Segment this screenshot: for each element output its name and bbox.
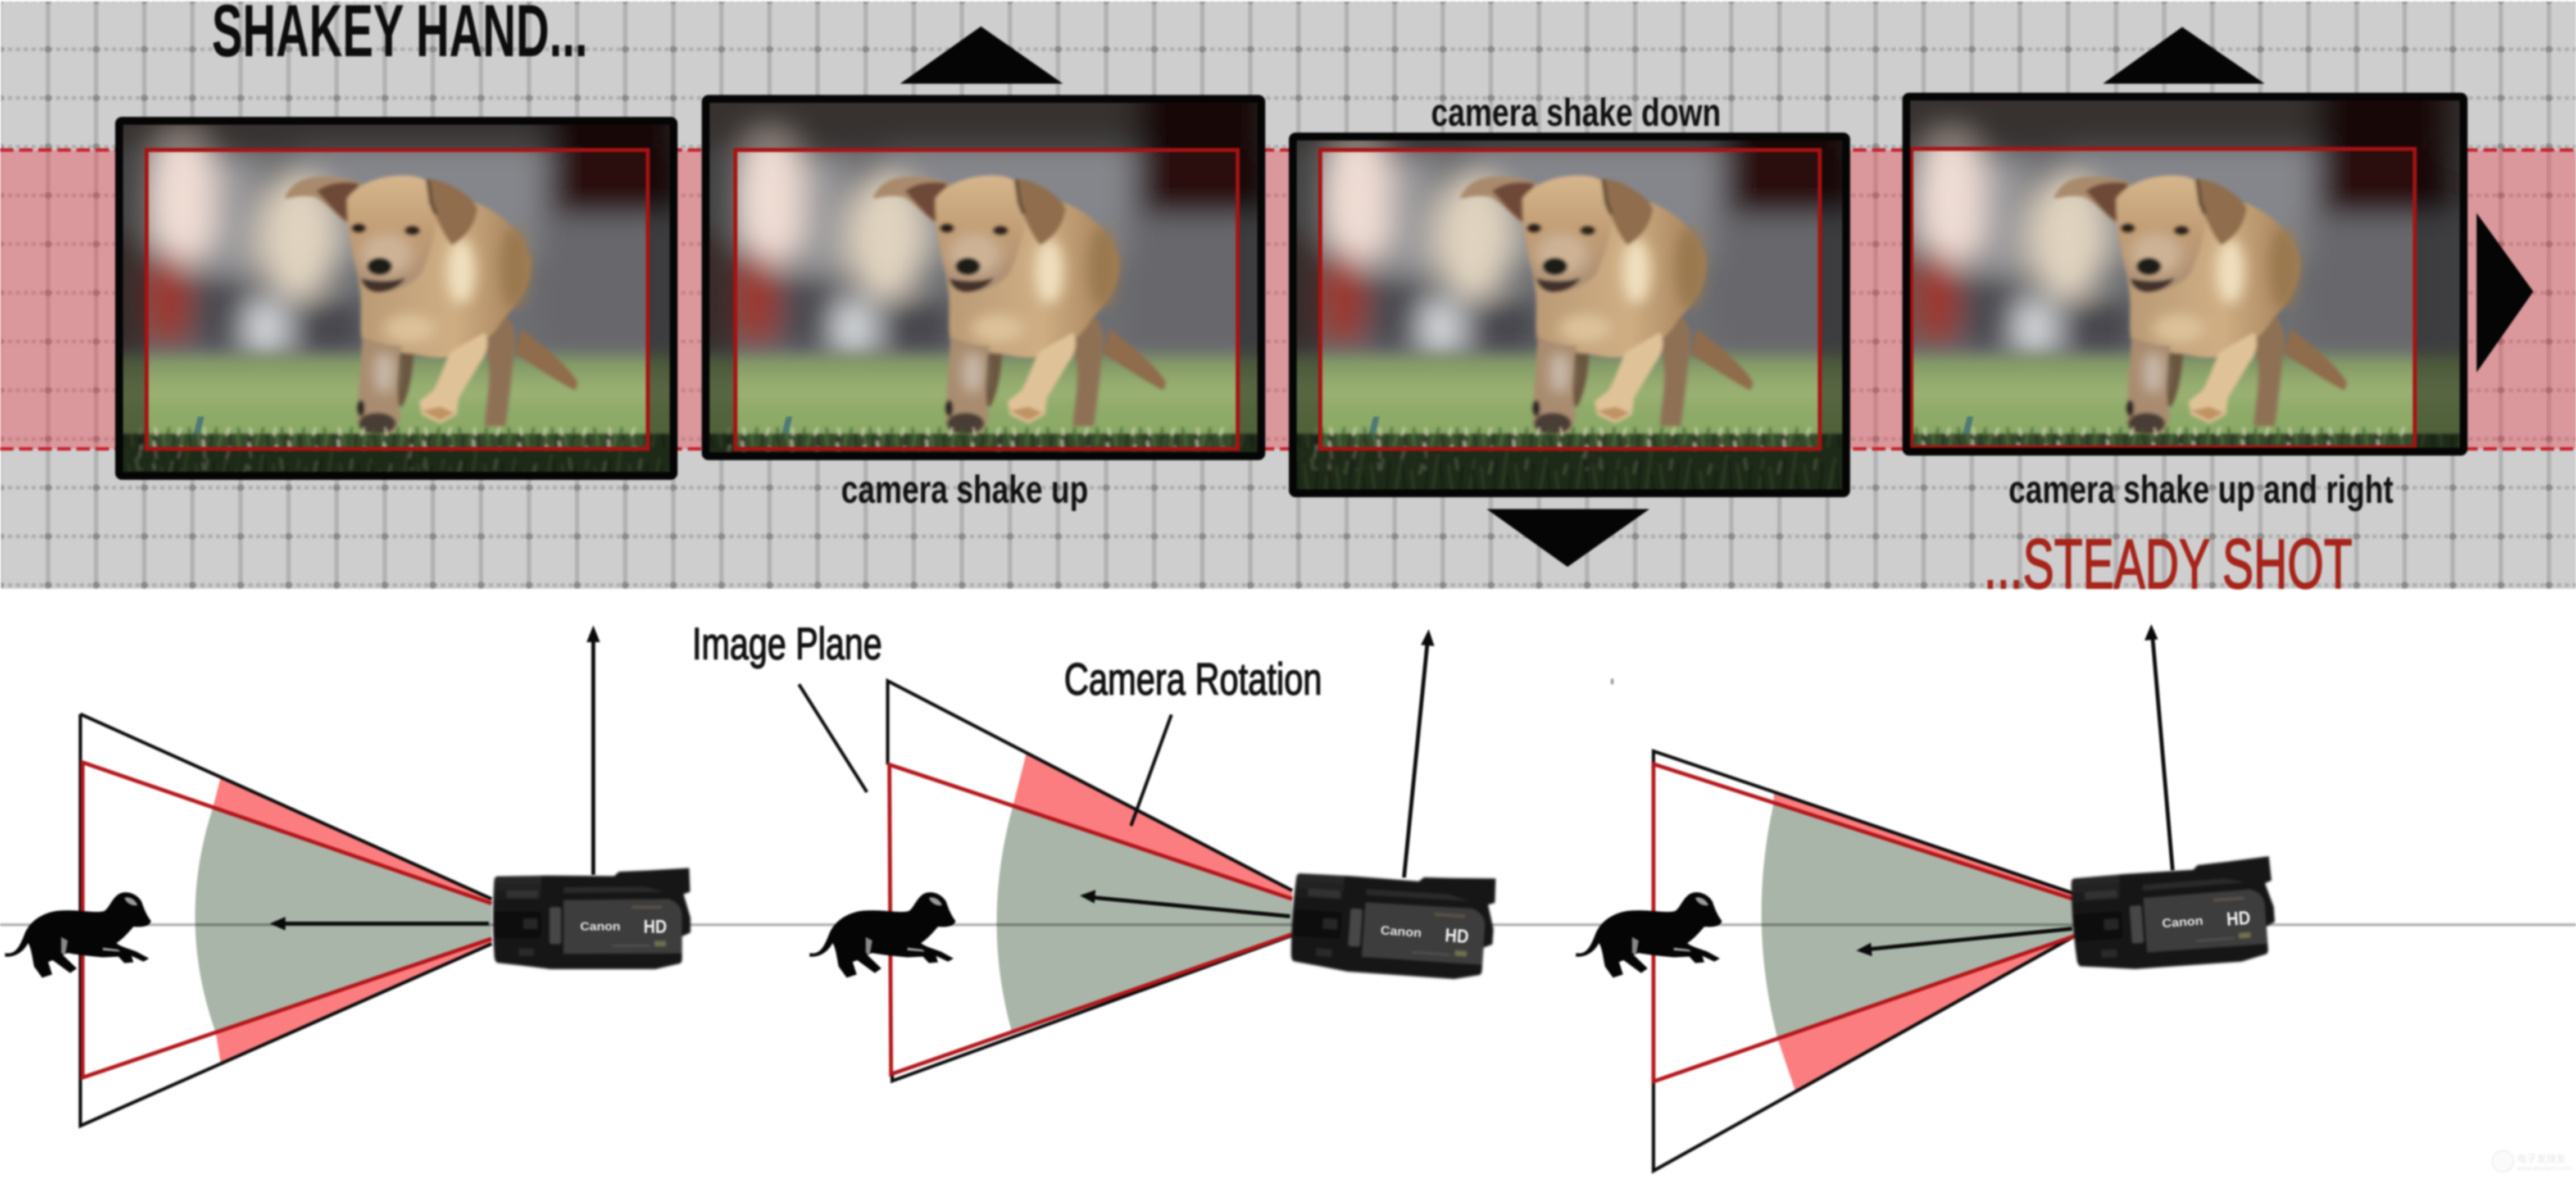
panel: camera rotation diagrams	[0, 619, 2576, 1171]
arrow: down below frame 3	[1487, 509, 1650, 567]
arrow: camera 2 forward vector	[1080, 890, 1290, 916]
dog silhouette 3	[1576, 892, 1722, 978]
arrow: camera 3 forward vector	[1856, 929, 2072, 956]
horizon line	[0, 924, 2576, 926]
panel: shaky hand photo strip	[0, 0, 2576, 603]
label: camera rotation: Camera Rotation	[1064, 654, 1322, 704]
watermark: www.elecfans.com	[2516, 1165, 2572, 1172]
frame 2: camera shake up	[700, 93, 1267, 462]
pink stabilised band	[0, 150, 2576, 449]
dog silhouette 1	[5, 892, 151, 978]
camera 2	[1289, 865, 1497, 981]
frame 3: camera shake down	[1287, 131, 1852, 499]
arrow: camera 1 up vector	[587, 625, 600, 875]
arrow: camera 1 forward vector	[270, 917, 489, 930]
dog silhouette 2	[810, 892, 956, 978]
caption: camera shake down: camera shake down	[1431, 90, 1721, 134]
diagram 1: neutral camera	[80, 714, 492, 1126]
caption: camera shake up and right: camera shake up and right	[2009, 467, 2393, 511]
arrow: right of frame 4	[2477, 213, 2533, 372]
camera 3	[2069, 856, 2277, 973]
frame 1: steady reference photo	[113, 116, 679, 481]
pointer: image plane	[799, 684, 867, 792]
caption: camera shake up: camera shake up	[841, 467, 1088, 511]
diagram 3: rotated down	[1653, 751, 2075, 1171]
frame 4: camera shake up and right	[1901, 91, 2469, 457]
watermark: 电子发烧友	[2517, 1153, 2566, 1165]
title: steady shot: ...STEADY SHOT	[1984, 525, 2352, 603]
watermark	[2492, 1151, 2572, 1172]
pointer: camera rotation	[1131, 715, 1171, 826]
camera 1	[493, 868, 690, 969]
diagram 2: rotated up	[888, 681, 1292, 1081]
label: image plane: Image Plane	[692, 619, 882, 669]
arrow: camera 2 up vector	[1404, 629, 1434, 878]
grid background	[1, 2, 2576, 589]
arrow: up above frame 2	[900, 26, 1063, 84]
arrow: up above frame 4	[2103, 27, 2265, 84]
stray dot	[1611, 679, 1614, 684]
arrow: camera 3 up vector	[2145, 624, 2173, 870]
